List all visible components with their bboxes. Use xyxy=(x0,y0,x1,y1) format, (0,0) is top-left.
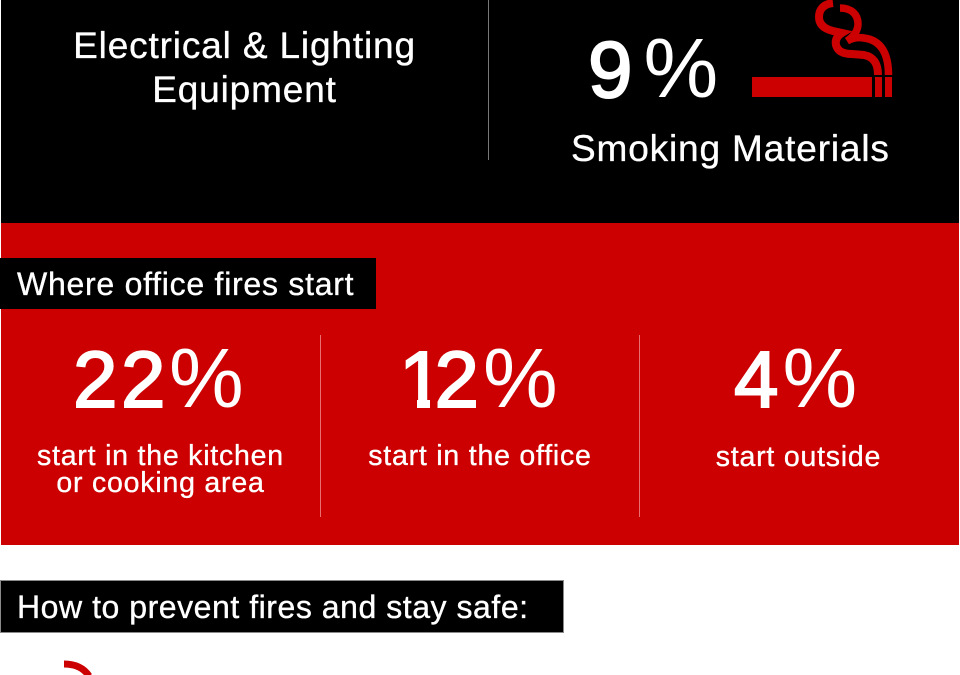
statistic: 4% outside: start outside xyxy=(716,441,881,473)
statistic: 22% kitchen: or cooking area xyxy=(56,467,265,499)
statistic: 22% kitchen: 22% xyxy=(73,331,244,425)
statistic: 12% office: 2% xyxy=(434,331,558,425)
icon: cigarette xyxy=(752,0,892,97)
heading: where office fires start xyxy=(0,258,376,309)
cause label: smoking materials: Smoking Materials xyxy=(571,128,890,169)
cause label: electrical and lighting equipment: Equipment xyxy=(152,69,337,110)
panel: where office fires start xyxy=(1,223,959,545)
heading: how to prevent fires: How to prevent fires and stay safe: xyxy=(17,589,529,625)
statistic: 22% kitchen xyxy=(37,331,284,499)
statistic: 12% office: 1 xyxy=(399,335,434,424)
vertical divider xyxy=(488,0,489,160)
panel: fire causes xyxy=(1,0,959,223)
heading: where office fires start: Where office fires start xyxy=(17,266,354,302)
statistic: 9%: 9% xyxy=(588,21,718,115)
cause label: electrical and lighting equipment: Electrical & Lighting xyxy=(73,25,416,66)
column divider xyxy=(639,335,640,517)
statistic: 4% outside xyxy=(716,331,881,473)
statistic: 12% office xyxy=(368,331,592,472)
cause label: electrical and lighting equipment xyxy=(73,25,416,110)
heading: how to prevent fires xyxy=(0,580,564,633)
statistic: 4% outside: 4% xyxy=(734,331,857,425)
statistic: 22% kitchen: start in the kitchen xyxy=(37,440,284,472)
statistic: 12% office: start in the office xyxy=(368,440,592,472)
icon: partial red arc xyxy=(64,660,92,675)
column divider xyxy=(320,335,321,517)
